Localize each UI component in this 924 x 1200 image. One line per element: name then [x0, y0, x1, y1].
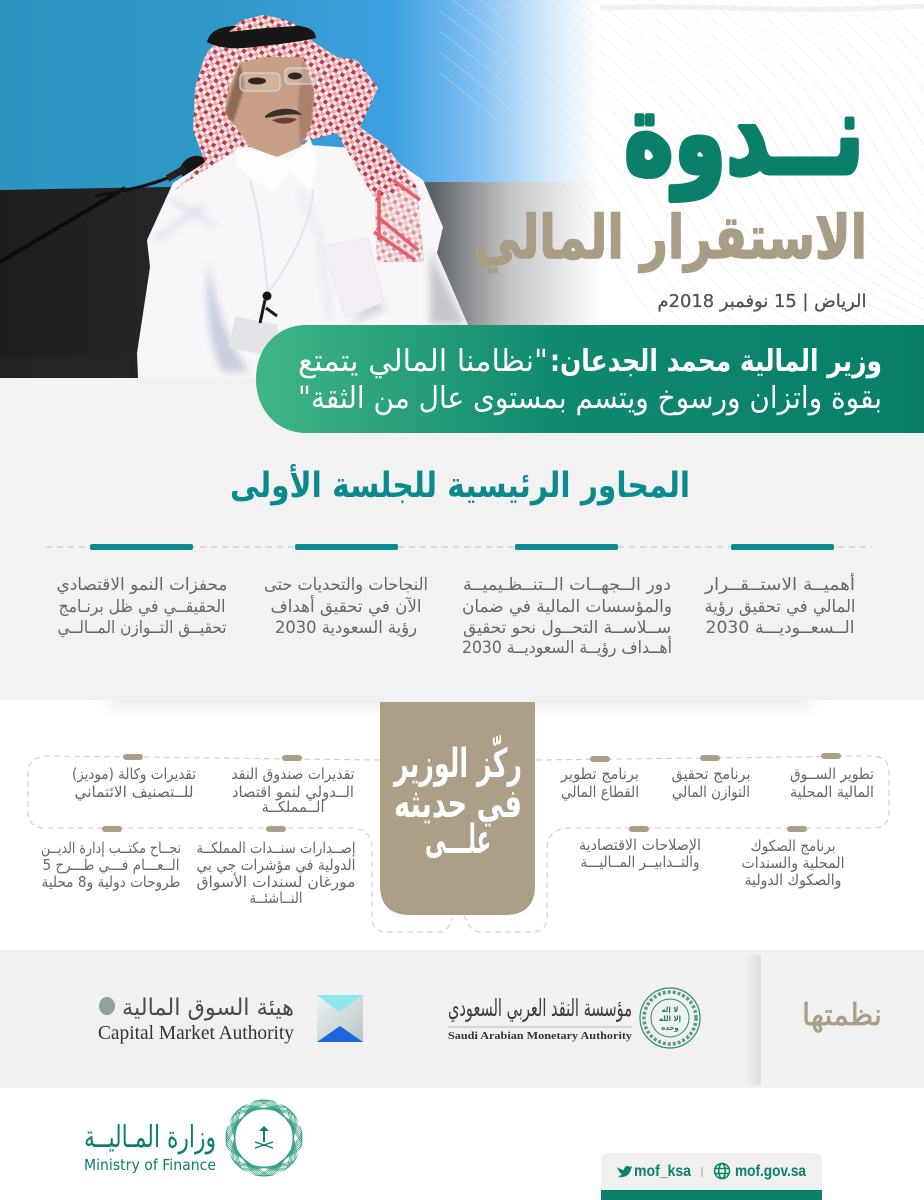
panel: organisers band: [0, 950, 924, 1088]
theme 1 text: أهميــة الاستــقــرار: [704, 573, 855, 595]
item: fiscal balance program: التوازن المالي: [672, 783, 750, 802]
logo: Ministry of Finance: Ministry of Finance: [84, 1156, 216, 1174]
timeline: [46, 544, 872, 550]
panel: minister focus box: ركّز الوزير: [393, 735, 522, 787]
tan markers: [102, 753, 841, 832]
item: Moody's estimates: تقديرات وكالة (موديز): [72, 765, 196, 783]
theme 4 text: محفزات النمو الاقتصادي: [56, 575, 228, 595]
theme 2 text: دور الــجهــات الــتنــظـيميــة: [463, 575, 671, 595]
quote banner: "نظامنا المالي يتمتع: [298, 344, 548, 379]
headdress: [175, 15, 424, 262]
theme 3 text: رؤية السعودية 2030: [275, 618, 417, 638]
contact box: [601, 1153, 822, 1200]
logo: Capital Market Authority: Capital Market Authority: [98, 1022, 294, 1044]
collar: [235, 138, 318, 193]
item: sovereign bonds: [196, 839, 356, 907]
item: sovereign bonds: الدولية في مؤشرات جي بي: [196, 856, 356, 875]
theme 4 text: [56, 575, 228, 638]
quote banner: بقوة واتزان ورسوخ ويتسم بمستوى عال من الثقة": [298, 381, 882, 416]
item: sukuk program: المحلية والسندات: [742, 854, 844, 872]
quote banner: [256, 325, 924, 433]
item: sovereign bonds: النــاشئــة: [250, 889, 302, 907]
theme 4 text: تحقيــق التــوازن المــالــي: [58, 618, 227, 638]
theme 3 text: النجاحات والتحديات حتى: [264, 575, 428, 595]
panel: minister focus box: [380, 702, 535, 915]
item: financial sector program: القطاع المالي: [561, 783, 639, 802]
theme 2 text: أهــداف رؤيــة السعوديــة 2030: [462, 636, 672, 658]
item: market development: تطوير الســوق: [790, 765, 874, 783]
logo: SAMA: Saudi Arabian Monetary Authority: [448, 1030, 633, 1042]
organised-by label: نظمتها: [802, 998, 882, 1033]
theme 3 text: [264, 575, 428, 638]
theme 1 text: [704, 573, 856, 638]
heading: main themes of first session: المحاور الرئيسية للجلسة الأولى: [230, 463, 690, 506]
logo: SAMA: إلا الله: [659, 1015, 681, 1023]
icon: twitter: [617, 1166, 632, 1177]
item: debt office: طروحات دولية و8 محلية: [42, 873, 180, 891]
item: financial sector program: برنامج تطوير: [560, 765, 639, 783]
item: sovereign bonds: إصــدارات سنــدات المملكــة: [196, 839, 356, 857]
icon: globe: [714, 1164, 730, 1178]
logo: SAMA: مؤسسة النقد العربي السعودي: [448, 994, 632, 1022]
logo: Ministry of Finance: وزارة المـاليــة: [84, 1120, 216, 1155]
dashed connectors: [28, 756, 889, 932]
microphone: [166, 151, 210, 183]
theme 2 text: ســلاســة التحــول نحو تحقيق: [463, 618, 671, 638]
item: market development: [790, 765, 874, 801]
logo: SAMA: لا إله: [662, 1006, 678, 1014]
emblem rosette: [223, 1097, 305, 1179]
photo: minister at microphone: [0, 0, 588, 378]
logo: SAMA: وحده: [661, 1024, 679, 1032]
lanyard: [250, 180, 313, 323]
item: economic reforms: والتــدابيــر المــاليـــة: [580, 853, 700, 871]
item: fiscal balance program: [672, 765, 750, 802]
panel: minister focus box: علـــى: [425, 817, 491, 863]
white thobe: [137, 140, 468, 378]
theme 2 text: والمؤسسات المالية في ضمان: [462, 597, 672, 617]
item: sukuk program: والصكوك الدولية: [744, 871, 842, 889]
item: sukuk program: [742, 837, 844, 889]
panel: minister focus box: في حديثه: [394, 781, 522, 827]
theme 1 text: المالي في تحقيق رؤية: [704, 597, 856, 617]
panel: grey session section: [0, 378, 924, 700]
face: [225, 57, 317, 157]
contact box: mof_ksa: [634, 1163, 691, 1180]
item: debt office: [41, 839, 181, 891]
logo: SAMA: [448, 988, 700, 1048]
item: sovereign bonds: مورغان لسندات الأسواق: [196, 872, 356, 891]
theme 4 text: الحقيقــي في ظل برنـامج: [58, 597, 226, 617]
soft shadow under grey section: [111, 700, 809, 708]
item: economic reforms: الإصلاحات الاقتصادية: [579, 836, 701, 854]
logo: Capital Market Authority: [98, 995, 363, 1044]
title: [473, 70, 867, 312]
theme 3 text: الآن في تحقيق أهداف: [270, 595, 422, 617]
theme 1 text: الــسعــوديـــة 2030: [706, 618, 854, 638]
item: market development: المالية المحلية: [790, 783, 874, 801]
item: debt office: نجــاح مكتــب إدارة الديــن: [41, 839, 181, 857]
item: sukuk program: برنامج الصكوك: [750, 837, 836, 855]
date: الرياض | 15 نوفمبر 2018م: [658, 291, 866, 312]
item: IMF estimates: الــدولي لنمو اقتصاد: [232, 783, 354, 802]
contact box: mof.gov.sa: [735, 1163, 806, 1180]
item: fiscal balance program: برنامج تحقيق: [672, 765, 750, 783]
item: IMF estimates: [232, 765, 354, 816]
theme 2 text: [462, 575, 672, 658]
wave line background pattern: [440, 0, 924, 325]
item: financial sector program: [560, 765, 639, 802]
item: debt office: الــعـــام فـــي طـــرح 5: [42, 856, 180, 875]
logo: Ministry of Finance: [84, 1097, 305, 1179]
item: economic reforms: [579, 836, 701, 871]
logo: Capital Market Authority: هيئة السوق المالية: [122, 995, 294, 1021]
item: Moody's estimates: للــتصنيف الائتماني: [74, 783, 194, 802]
item: IMF estimates: تقديرات صندوق النقد: [232, 765, 354, 783]
item: Moody's estimates: [72, 765, 196, 802]
item: IMF estimates: الــمملكــة: [262, 798, 324, 816]
